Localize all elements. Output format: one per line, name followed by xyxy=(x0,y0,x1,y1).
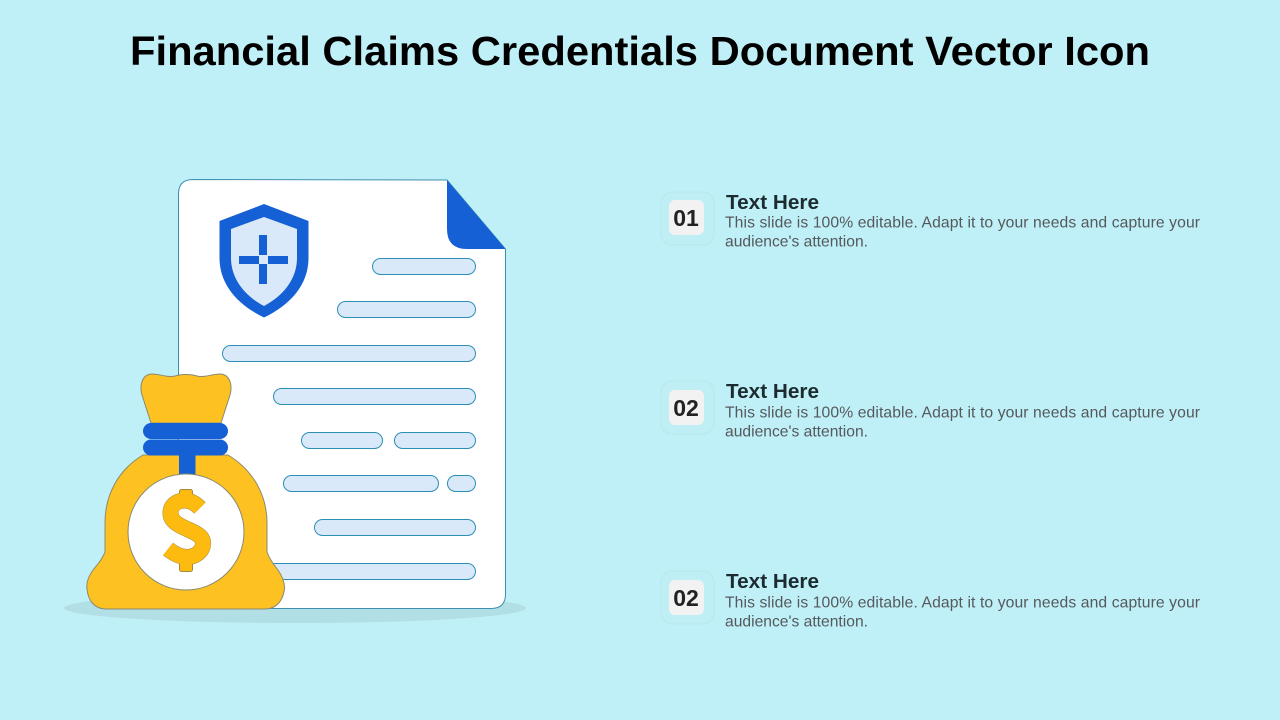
folded corner xyxy=(447,180,506,249)
bag tie xyxy=(143,423,228,475)
number badge 03 xyxy=(661,571,714,624)
list item 02 xyxy=(661,381,1200,440)
description xyxy=(725,404,1200,440)
description: This slide is 100% editable. Adapt it to your needs and capture your xyxy=(725,404,1200,422)
icon: shield xyxy=(220,204,308,318)
heading: Text Here xyxy=(726,571,819,593)
title: Financial Claims Credentials Document Vector Icon xyxy=(130,28,1150,74)
number badge 02: 02 xyxy=(673,395,699,421)
number badge 03: 02 xyxy=(673,585,699,611)
description: audience's attention. xyxy=(725,424,868,440)
description: This slide is 100% editable. Adapt it to your needs and capture your xyxy=(725,594,1200,612)
heading: Text Here xyxy=(726,381,819,403)
bag body xyxy=(87,455,285,609)
coin circle xyxy=(128,474,244,590)
list item 03 xyxy=(661,571,1200,630)
document text lines xyxy=(222,258,476,580)
bag neck xyxy=(141,374,231,423)
icon: money bag xyxy=(87,374,285,609)
number badge 02 xyxy=(661,381,714,434)
document illustration xyxy=(178,180,506,608)
list item 01 xyxy=(661,192,1200,250)
description: audience's attention. xyxy=(725,234,868,250)
heading: Text Here xyxy=(726,192,819,214)
document page xyxy=(178,180,506,608)
icon: dollar sign xyxy=(168,490,203,572)
ground shadow xyxy=(64,593,526,623)
number badge 01: 01 xyxy=(673,205,699,231)
description xyxy=(725,214,1200,250)
number badge 01 xyxy=(661,192,714,245)
description: audience's attention. xyxy=(725,614,868,630)
description: This slide is 100% editable. Adapt it to your needs and capture your xyxy=(725,214,1200,232)
description xyxy=(725,594,1200,630)
